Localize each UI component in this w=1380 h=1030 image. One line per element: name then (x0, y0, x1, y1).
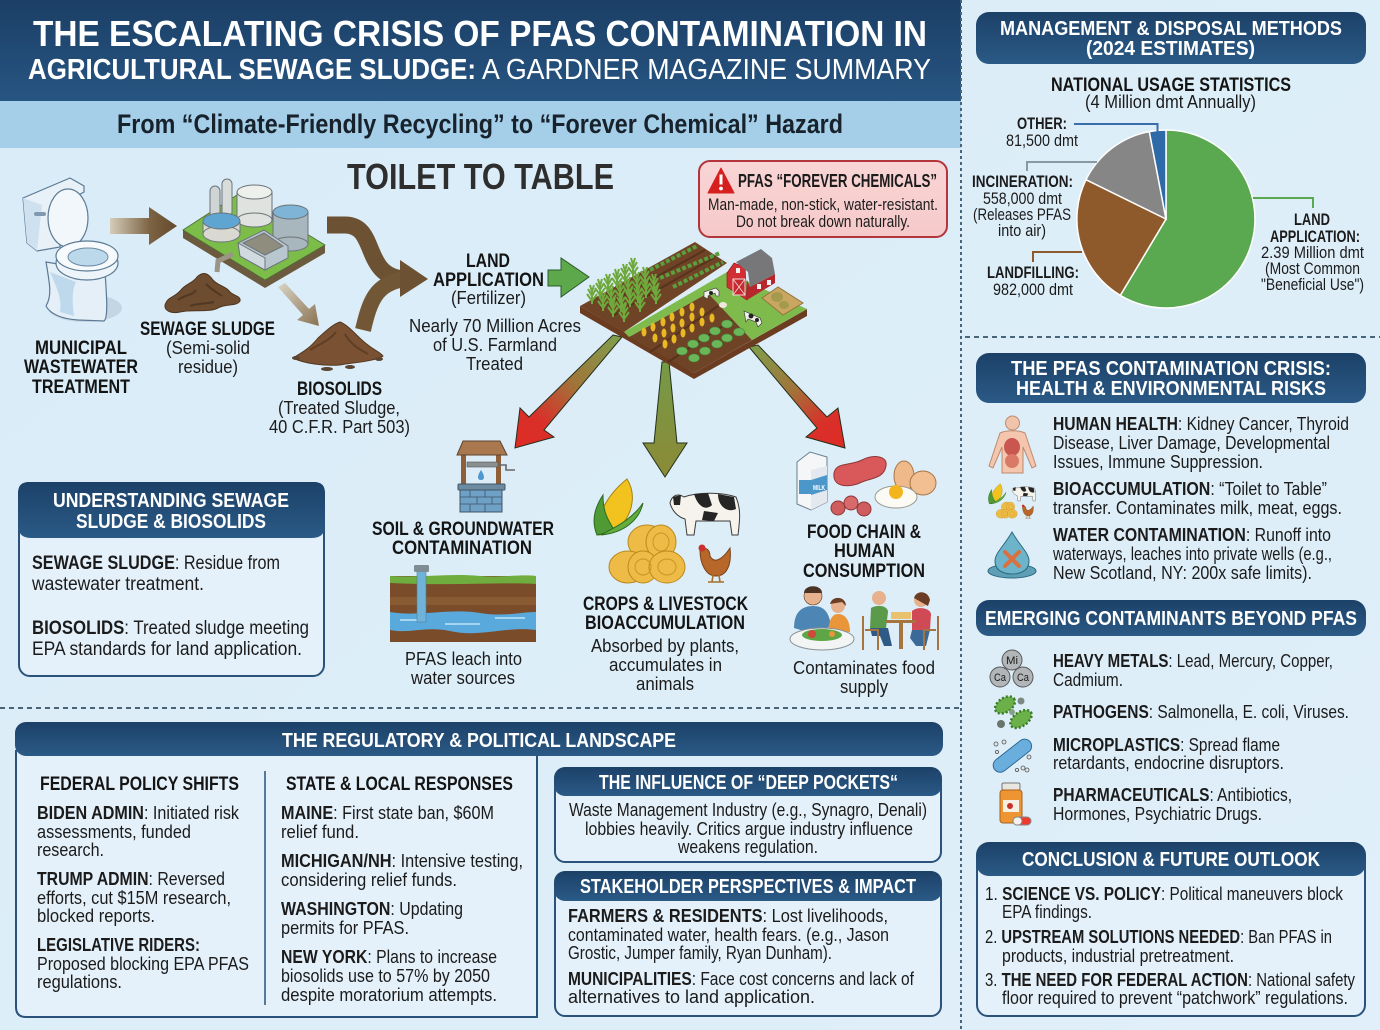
text: human health: HUMAN HEALTH: Kidney Cancer, Thyroid (1053, 414, 1349, 434)
text: heavy metals: Cadmium. (1053, 670, 1123, 690)
panel: management and disposal header: (2024 ESTIMATES) (1086, 38, 1255, 60)
panel: understanding sewage sludge and biosolids: EPA standards for land application. (32, 639, 302, 660)
text: food chain and human consumption: FOOD CHAIN & (807, 522, 921, 543)
text: municipal wastewater treatment: TREATMENT (32, 377, 130, 398)
heading: national usage statistics (1051, 75, 1291, 112)
icon: water well (457, 441, 515, 512)
panel: stakeholder perspectives and impact: Grostic, Jumper family, Ryan Dunham). (568, 943, 832, 963)
subtitle bar: From “Climate-Friendly Recycling” to “Forever Chemical” Hazard (117, 109, 843, 139)
panel: conclusion and future outlook: EPA findings. (1002, 902, 1092, 922)
panel: influence of deep pockets: Waste Management Industry (e.g., Synagro, Denali) (569, 800, 927, 820)
text: microplastics: MICROPLASTICS: Spread flame (1053, 735, 1280, 755)
label: incineration: into air) (998, 222, 1046, 240)
label: land application: LAND (1294, 210, 1330, 229)
panel: stakeholder perspectives and impact: FARMERS & RESIDENTS: Lost livelihoods, (568, 906, 888, 926)
text: crops and livestock: Absorbed by plants, (591, 636, 739, 656)
panel: conclusion and future outlook: CONCLUSION & FUTURE OUTLOOK (1022, 849, 1320, 871)
text: biosolids: (Treated Sludge, (278, 398, 400, 418)
text: crops and livestock: CROPS & LIVESTOCK (583, 594, 748, 615)
panel: understanding sewage sludge and biosolids: wastewater treatment. (31, 574, 204, 595)
icon: sewage sludge pile (165, 273, 240, 313)
icon: chicken (698, 544, 730, 582)
panel: PFAS contamination crisis header: HEALTH & ENVIRONMENTAL RISKS (1016, 378, 1326, 400)
text: pharmaceuticals (1053, 785, 1292, 824)
text: food chain and human consumption: HUMAN (834, 541, 895, 562)
icon: toilet (23, 178, 122, 322)
panel: emerging contaminants header (976, 600, 1366, 636)
icon: milk carton (797, 452, 827, 510)
heading: toilet to table: TOILET TO TABLE (347, 156, 614, 197)
column: state and local responses: WASHINGTON: Updating (281, 899, 463, 919)
label: landfilling: LANDFILLING: (987, 263, 1079, 282)
panel: conclusion and future outlook: 2. UPSTREAM SOLUTIONS NEEDED: Ban PFAS in (985, 927, 1332, 947)
text: land application: of U.S. Farmland (433, 335, 557, 355)
text: bioaccumulation: BIOACCUMULATION: “Toilet to Table” (1053, 479, 1327, 499)
text: pharmaceuticals: Hormones, Psychiatric Drugs. (1053, 804, 1262, 824)
column: federal policy shifts: LEGISLATIVE RIDERS: (37, 935, 200, 955)
callout: PFAS forever chemicals: Do not break down naturally. (736, 213, 910, 231)
panel: understanding sewage sludge and biosolids: SLUDGE & BIOSOLIDS (76, 511, 266, 533)
panel: influence of deep pockets (554, 767, 942, 862)
icon: heavy metals (990, 650, 1033, 687)
text: pathogens: PATHOGENS: Salmonella, E. coli, Viruses. (1053, 702, 1349, 722)
text: water contamination: WATER CONTAMINATION: Runoff into (1053, 525, 1331, 545)
panel: conclusion and future outlook: 1. SCIENCE VS. POLICY: Political maneuvers block (985, 884, 1344, 904)
arrow: land application to farm (548, 258, 589, 297)
column: state and local responses: NEW YORK: Plans to increase (281, 947, 497, 967)
arrow: toilet to treatment plant (110, 207, 177, 245)
column: federal policy shifts: Proposed blocking EPA PFAS (37, 954, 249, 974)
panel: influence of deep pockets: weakens regulation. (677, 837, 818, 857)
column: federal policy shifts: research. (37, 840, 104, 860)
pie chart: disposal methods (1077, 130, 1255, 308)
column: state and local responses: relief fund. (281, 822, 359, 842)
panel: regulatory and political landscape (15, 722, 943, 1017)
text: food chain and human consumption (803, 522, 925, 582)
label: other: 81,500 dmt (1006, 132, 1078, 150)
title banner (0, 0, 961, 101)
label: incineration: 558,000 dmt (983, 190, 1062, 208)
arrow: sludge to biosolids (278, 283, 319, 326)
title banner: THE ESCALATING CRISIS OF PFAS CONTAMINATION IN (33, 13, 927, 54)
text: crops and livestock: animals (636, 674, 694, 694)
icon: wastewater treatment plant (183, 179, 325, 288)
arrow: farm to crops and livestock (643, 362, 687, 477)
column: state and local responses: STATE & LOCAL RESPONSES (286, 774, 513, 795)
text: soil and groundwater: CONTAMINATION (392, 538, 532, 559)
column: federal policy shifts: blocked reports. (37, 906, 155, 926)
subtitle bar (0, 101, 961, 148)
icon: human body (989, 416, 1036, 473)
text: contaminates food supply: Contaminates food (793, 658, 935, 678)
text: sewage sludge: SEWAGE SLUDGE (140, 319, 275, 340)
panel: understanding sewage sludge and biosolids: SEWAGE SLUDGE: Residue from (32, 553, 280, 574)
column: state and local responses: permits for PFAS. (281, 918, 409, 938)
text: pharmaceuticals: PHARMACEUTICALS: Antibiotics, (1053, 785, 1292, 805)
text: municipal wastewater treatment: WASTEWATER (24, 357, 138, 378)
icon: people eating (790, 586, 938, 650)
arrow: farm to soil and groundwater (515, 335, 622, 448)
icon: heavy metals: Ca (1017, 672, 1030, 684)
text: crops and livestock: accumulates in (609, 655, 722, 675)
label: incineration: INCINERATION: (972, 172, 1073, 191)
leader lines (1027, 124, 1313, 262)
panel: conclusion and future outlook: 3. THE NEED FOR FEDERAL ACTION: National safety (985, 970, 1355, 990)
text: land application (409, 251, 581, 374)
panel: management and disposal header: MANAGEMENT & DISPOSAL METHODS (1000, 18, 1342, 40)
column: federal policy shifts: FEDERAL POLICY SHIFTS (40, 774, 239, 795)
label: other: OTHER: (1017, 114, 1067, 133)
icon: biosolids pile (292, 322, 383, 371)
panel: stakeholder perspectives and impact (554, 871, 942, 1016)
panel: understanding sewage sludge and biosolids: UNDERSTANDING SEWAGE (53, 490, 289, 512)
column: state and local responses: MAINE: First state ban, $60M (281, 803, 494, 823)
text: municipal wastewater treatment (24, 338, 138, 398)
text: land application: Nearly 70 Million Acres (409, 316, 581, 336)
text: food chain and human consumption: CONSUMPTION (803, 561, 925, 582)
text: contaminates food supply (793, 658, 935, 697)
panel: stakeholder perspectives and impact: alternatives to land application. (568, 987, 815, 1007)
arrow: curved flow to land application (327, 225, 428, 330)
text: heavy metals: HEAVY METALS: Lead, Mercury, Copper, (1053, 651, 1333, 671)
heading: national usage statistics: (4 Million dmt Annually) (1085, 92, 1256, 112)
text: municipal wastewater treatment: MUNICIPAL (35, 338, 127, 359)
icon: contaminated water drop (988, 532, 1036, 578)
text: PFAS leach into water: water sources (410, 668, 515, 688)
text: land application: Treated (466, 354, 523, 374)
text: sewage sludge: residue) (178, 357, 238, 377)
title banner: AGRICULTURAL SEWAGE SLUDGE: (28, 54, 476, 86)
icon: milk carton: MILK (813, 485, 825, 492)
text: sewage sludge: (Semi-solid (166, 338, 250, 358)
icon: pathogens (992, 693, 1035, 732)
panel: influence of deep pockets: THE INFLUENCE OF “DEEP POCKETS“ (599, 772, 898, 794)
text: biosolids: BIOSOLIDS (297, 379, 382, 400)
panel: regulatory and political landscape: THE REGULATORY & POLITICAL LANDSCAPE (282, 730, 676, 752)
label: land application: (Most Common (1265, 260, 1360, 278)
text: water contamination (1052, 525, 1332, 583)
column: state and local responses: considering relief funds. (281, 870, 457, 890)
column: state and local responses: despite moratorium attempts. (281, 985, 497, 1005)
panel: understanding sewage sludge and biosolids: BIOSOLIDS: Treated sludge meeting (32, 618, 309, 639)
column: federal policy shifts: BIDEN ADMIN: Initiated risk (37, 803, 240, 823)
icon: corn (594, 479, 643, 535)
panel: stakeholder perspectives and impact: STAKEHOLDER PERSPECTIVES & IMPACT (580, 876, 916, 898)
column: state and local responses (281, 774, 523, 1005)
panel: PFAS contamination crisis header (976, 353, 1366, 403)
text: water contamination: New Scotland, NY: 200x safe limits). (1053, 563, 1312, 583)
column: federal policy shifts: efforts, cut $15M research, (37, 888, 231, 908)
column: federal policy shifts: assessments, funded (37, 822, 191, 842)
panel: stakeholder perspectives and impact: contaminated water, health fears. (e.g., Jason (568, 925, 889, 945)
column: federal policy shifts: regulations. (37, 972, 122, 992)
text: microplastics: retardants, endocrine disruptors. (1053, 753, 1284, 773)
label: other (1006, 114, 1078, 150)
label: land application (1261, 210, 1364, 294)
text: biosolids (269, 379, 410, 437)
text: human health (1053, 414, 1349, 472)
icon: pharmaceuticals (1000, 783, 1031, 825)
text: contaminates food supply: supply (840, 677, 888, 697)
column: federal policy shifts: TRUMP ADMIN: Reversed (37, 869, 225, 889)
label: land application: 2.39 Million dmt (1261, 244, 1364, 262)
panel: conclusion and future outlook: floor required to prevent “patchwork” regulations. (1002, 988, 1348, 1008)
icon: microplastics (990, 736, 1034, 775)
text: bioaccumulation: transfer. Contaminates milk, meat, eggs. (1053, 498, 1342, 518)
label: landfilling (987, 263, 1079, 299)
text: bioaccumulation (1053, 479, 1342, 518)
icon: isometric farm (580, 242, 807, 379)
callout: PFAS forever chemicals (699, 161, 947, 237)
panel: influence of deep pockets: lobbies heavily. Critics argue industry influence (585, 819, 913, 839)
text: PFAS leach into water: PFAS leach into (405, 649, 522, 669)
text: biosolids: 40 C.F.R. Part 503) (269, 417, 410, 437)
panel: PFAS contamination crisis header: THE PFAS CONTAMINATION CRISIS: (1011, 358, 1331, 380)
heading: national usage statistics: NATIONAL USAGE STATISTICS (1051, 75, 1291, 96)
text: PFAS leach into water (405, 649, 522, 688)
column: state and local responses: MICHIGAN/NH: Intensive testing, (281, 851, 523, 871)
text: soil and groundwater: SOIL & GROUNDWATER (372, 519, 554, 540)
text: crops and livestock (583, 594, 748, 694)
panel: conclusion and future outlook (976, 842, 1366, 1016)
diagram: groundwater cross section (390, 565, 536, 642)
panel: management and disposal header (976, 12, 1366, 64)
arrow: farm to food chain (749, 345, 845, 448)
text: heavy metals (1053, 651, 1333, 690)
callout: PFAS forever chemicals: PFAS “FOREVER CHEMICALS” (738, 171, 937, 191)
text: soil and groundwater (372, 519, 554, 559)
text: sewage sludge (140, 319, 275, 377)
text: human health: Issues, Immune Suppression. (1053, 452, 1263, 472)
label: incineration (972, 172, 1073, 240)
panel: stakeholder perspectives and impact: MUNICIPALITIES: Face cost concerns and lack of (568, 969, 915, 989)
label: landfilling: 982,000 dmt (993, 281, 1073, 299)
icon: heavy metals: Mi (1006, 655, 1018, 667)
icon: heavy metals: Ca (994, 672, 1007, 684)
text: human health: Disease, Liver Damage, Developmental (1053, 433, 1330, 453)
icon: meat and eggs (831, 457, 936, 516)
text: land application: APPLICATION (433, 270, 544, 291)
panel: understanding sewage sludge and biosolids (18, 482, 325, 676)
text: land application: LAND (466, 251, 510, 272)
icon: bioaccumulation (988, 484, 1036, 518)
icon: cow (670, 493, 740, 535)
title banner: A GARDNER MAGAZINE SUMMARY (482, 54, 931, 86)
column: federal policy shifts (37, 774, 249, 992)
panel: conclusion and future outlook: products, industrial pretreatment. (1002, 946, 1234, 966)
callout: PFAS forever chemicals: Man-made, non-stick, water-resistant. (708, 196, 938, 214)
text: microplastics (1053, 735, 1284, 773)
text: crops and livestock: BIOACCUMULATION (585, 613, 745, 634)
label: incineration: (Releases PFAS (973, 206, 1071, 224)
icon: hay bales (609, 525, 685, 583)
text: land application: (Fertilizer) (451, 288, 526, 308)
column: state and local responses: biosolids use to 57% by 2050 (281, 966, 490, 986)
